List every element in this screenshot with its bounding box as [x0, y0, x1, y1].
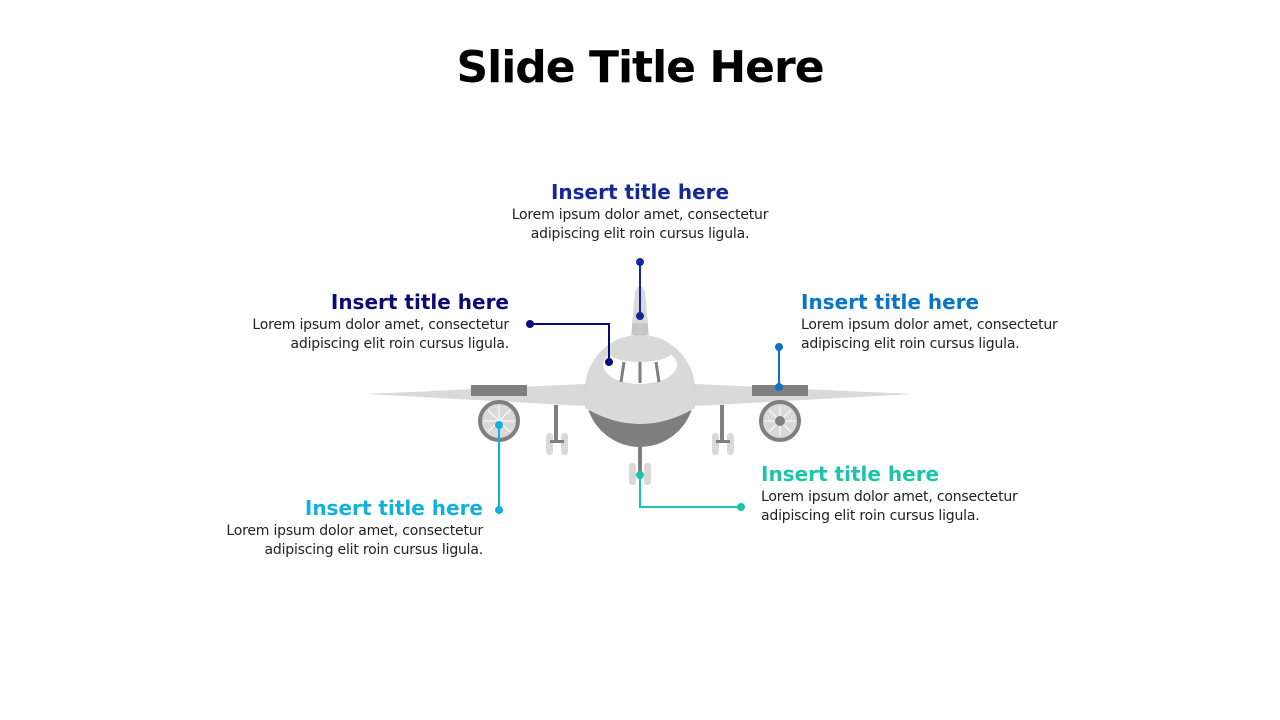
text block: upper left: adipiscing elit roin cursus ligula. — [291, 336, 509, 352]
text block: lower left: Lorem ipsum dolor amet, consectetur — [226, 523, 483, 539]
text block: lower right: Insert title here — [761, 462, 939, 486]
connector: lower left — [496, 422, 502, 514]
connector: upper right — [776, 344, 782, 390]
text block: lower left: adipiscing elit roin cursus ligula. — [265, 542, 483, 558]
text block: lower right: Lorem ipsum dolor amet, consectetur — [761, 489, 1018, 505]
text block: upper right: adipiscing elit roin cursus ligula. — [801, 336, 1019, 352]
text block: lower left: Insert title here — [305, 496, 483, 520]
connector: top — [636, 258, 644, 320]
text block: upper right: Lorem ipsum dolor amet, consectetur — [801, 317, 1058, 333]
text block: top: adipiscing elit roin cursus ligula. — [531, 226, 749, 242]
text block: top — [512, 180, 768, 242]
text block: top: Lorem ipsum dolor amet, consectetur — [512, 207, 768, 223]
text block: upper left: Lorem ipsum dolor amet, consectetur — [252, 317, 509, 333]
text block: upper left: Insert title here — [331, 290, 509, 314]
text block: upper left — [252, 290, 510, 352]
text block: top: Insert title here — [551, 180, 729, 204]
icon: airplane — [367, 286, 913, 485]
text block: lower right: adipiscing elit roin cursus ligula. — [761, 508, 979, 524]
text block: lower left — [226, 496, 484, 558]
title: Slide Title Here — [456, 42, 824, 93]
connector: lower right — [636, 472, 744, 510]
text block: lower right — [761, 462, 1018, 524]
connector: upper left — [526, 320, 612, 366]
text block: upper right: Insert title here — [801, 290, 979, 314]
text block: upper right — [801, 290, 1058, 352]
